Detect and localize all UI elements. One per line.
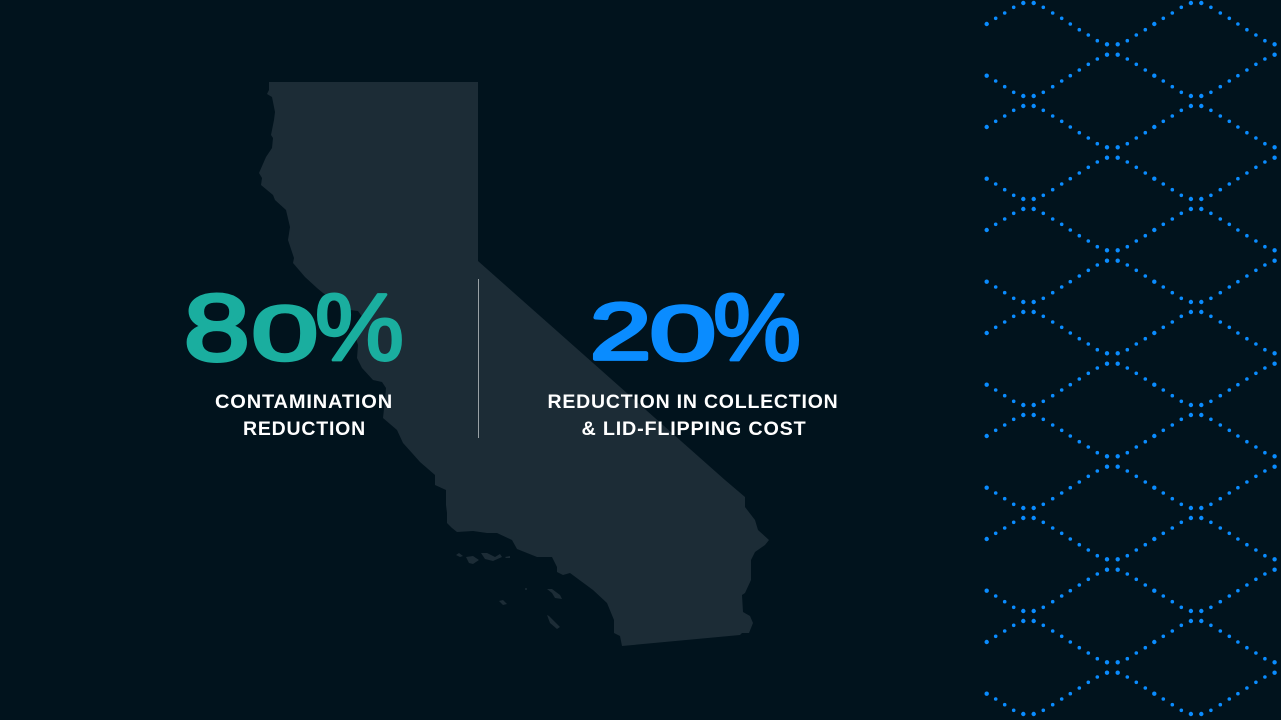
number: 20% xyxy=(590,274,801,381)
stat: 20% collection cost reduction xyxy=(548,274,838,440)
channel islands xyxy=(456,553,562,629)
label: reduction in collection and lid-flipping cost: REDUCTION IN COLLECTION xyxy=(548,391,838,413)
dotted diamond pattern xyxy=(984,1,1281,716)
number: 20%: 2 xyxy=(590,287,651,376)
label: reduction in collection and lid-flipping cost: & LID-FLIPPING COST xyxy=(582,418,806,440)
number: 80%: % xyxy=(315,274,404,380)
label: contamination reduction xyxy=(215,391,393,440)
number: 20%: 0 xyxy=(650,291,716,377)
mainland xyxy=(259,82,769,646)
number: 80%: 8 xyxy=(184,275,250,380)
map: California silhouette xyxy=(259,82,769,646)
number: 80%: 0 xyxy=(252,291,318,377)
number: 80% xyxy=(184,274,404,380)
divider xyxy=(478,279,479,438)
label: contamination reduction: CONTAMINATION xyxy=(215,391,393,413)
label: reduction in collection and lid-flipping cost xyxy=(548,391,838,440)
number: 20%: % xyxy=(713,274,801,381)
stat: 80% contamination reduction xyxy=(184,274,404,440)
label: contamination reduction: REDUCTION xyxy=(243,418,366,440)
